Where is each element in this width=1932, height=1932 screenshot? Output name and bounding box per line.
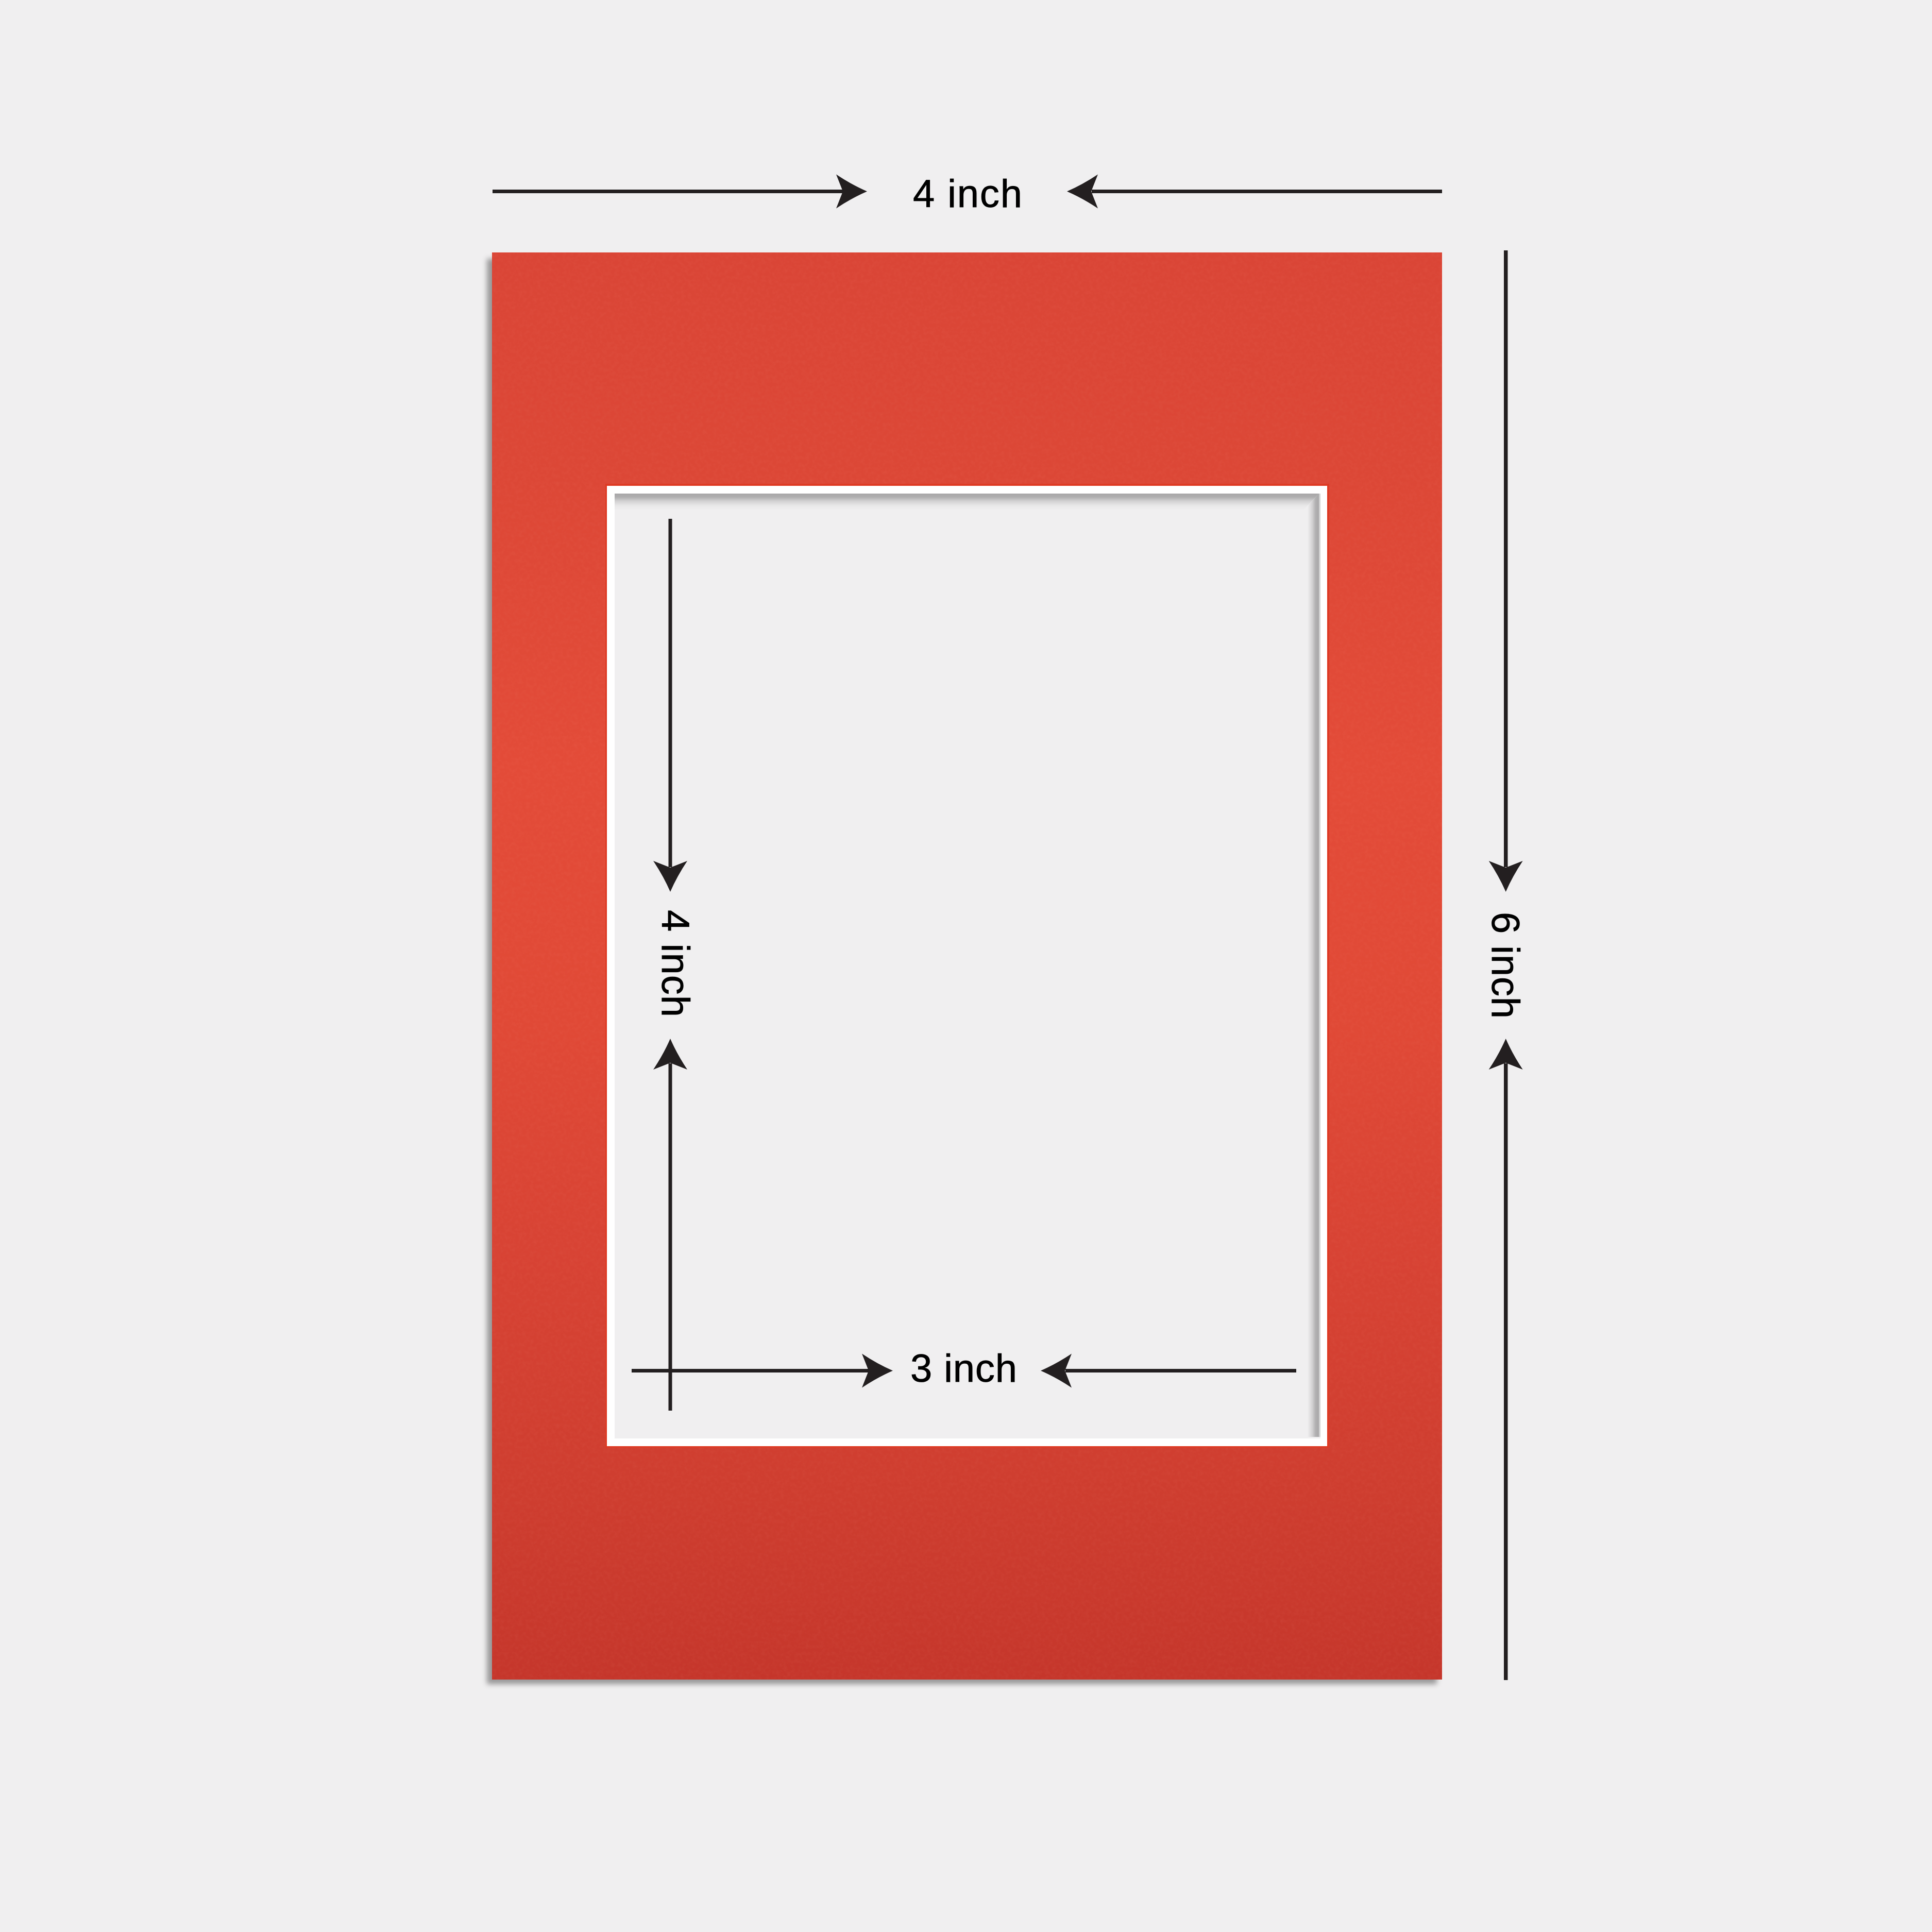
right inner shadow: [1308, 494, 1319, 1437]
arrow: left, pointing right: [632, 1354, 893, 1388]
dimension: window width 3 inch: [632, 1347, 1296, 1391]
white bevel frame: [607, 486, 1327, 1446]
dimension: window height 4 inch: [653, 519, 697, 1411]
mat drop shadow: [487, 259, 1437, 1684]
arrow: top, pointing down: [653, 519, 687, 892]
arrow: right, pointing left: [1067, 174, 1442, 208]
red mat surface: [492, 252, 1442, 1680]
label: 6 inch: 6 inch: [1483, 912, 1527, 1019]
window bevel outline: [605, 484, 1329, 1448]
dimension: outer width 4 inch: [493, 172, 1442, 216]
paper grain texture: [492, 252, 1442, 1680]
top inner shadow: [615, 494, 1319, 510]
inner shadow strip: [1319, 494, 1320, 1437]
arrow: top, pointing down: [1489, 250, 1523, 892]
arrow: right, pointing left: [1041, 1354, 1296, 1388]
label: 3 inch: 3 inch: [910, 1347, 1017, 1391]
photo mat board: [487, 252, 1442, 1684]
label: 4 inch: 4 inch: [653, 910, 697, 1017]
label: 4 inch: 4 inch: [913, 172, 1022, 216]
dimension: outer height 6 inch: [1483, 250, 1527, 1680]
window opening: [615, 494, 1320, 1438]
arrow: bottom, pointing up: [1489, 1039, 1523, 1680]
arrow: bottom, pointing up: [653, 1039, 687, 1411]
arrow: left, pointing right: [493, 174, 867, 208]
